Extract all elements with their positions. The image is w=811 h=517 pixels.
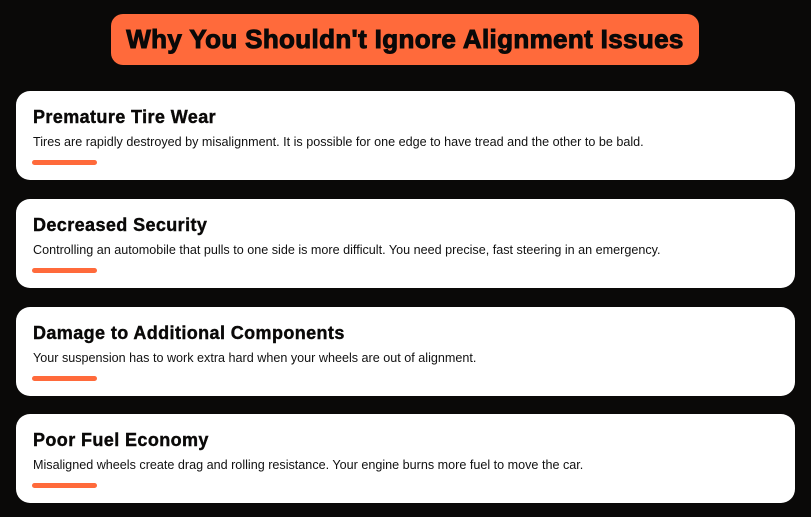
title <box>111 14 699 65</box>
heading: Damage to Additional Components <box>33 323 345 343</box>
heading: Decreased Security <box>33 215 207 235</box>
panel: damage to components <box>16 307 795 396</box>
accent bar <box>32 483 97 488</box>
panel: decreased security <box>16 199 795 288</box>
panel: premature tire wear <box>16 91 795 180</box>
heading: Poor Fuel Economy <box>33 430 209 450</box>
accent bar <box>32 160 97 165</box>
title: Why You Shouldn't Ignore Alignment Issues <box>126 24 684 54</box>
text block: Controlling an automobile that pulls to one side is more difficult. You need precise, fast steering in an emergency. <box>33 243 660 257</box>
accent bar <box>32 376 97 381</box>
text block: Misaligned wheels create drag and rolling resistance. Your engine burns more fuel to move the car. <box>33 458 583 472</box>
heading: Premature Tire Wear <box>33 107 216 127</box>
text block: Your suspension has to work extra hard when your wheels are out of alignment. <box>33 351 476 365</box>
panel: poor fuel economy <box>16 414 795 503</box>
text block: Tires are rapidly destroyed by misalignment. It is possible for one edge to have tread and the other to be bald. <box>33 135 644 149</box>
accent bar <box>32 268 97 273</box>
